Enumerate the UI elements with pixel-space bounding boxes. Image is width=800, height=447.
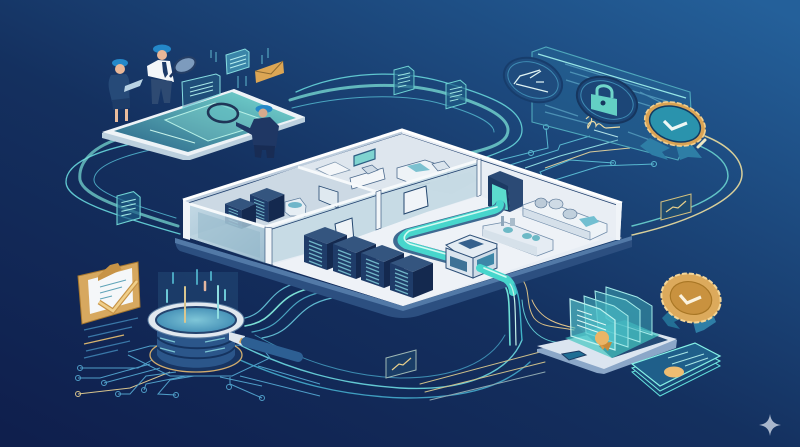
glass certificate pages: [606, 287, 652, 335]
glass wall long: [272, 160, 480, 263]
beam glow: [158, 272, 238, 318]
icon: clipboard with check: [78, 262, 140, 324]
person: inspector with magnifier: [147, 44, 198, 104]
person: woman with tablet: [109, 59, 143, 122]
icon: approval ribbon badge: [639, 95, 711, 160]
panel: isometric facility floor plan: [175, 130, 632, 318]
circuit traces: [76, 345, 320, 400]
panel: certificate card stack: [632, 343, 720, 396]
icon: small gold seal: [595, 331, 612, 351]
tablet body: [102, 89, 305, 160]
back room floor: [298, 134, 480, 192]
panel: certificate device: [537, 287, 677, 374]
device body: [537, 333, 677, 374]
icon: document on left flow: [117, 192, 140, 225]
code text lines beside clipboard: [84, 318, 138, 358]
magnifier ring: [148, 302, 244, 338]
arrow: wavy lines from magnifier to facility: [245, 282, 332, 338]
glass panel: [532, 47, 692, 160]
arrow: bottom flow loops: [240, 300, 575, 400]
front floor highlight: [272, 196, 600, 306]
arrow: top flow from tablet to facility: [290, 74, 522, 160]
stream out of facility: [480, 268, 574, 345]
partitions: [265, 160, 480, 227]
icon: document on top flow 1: [394, 66, 414, 95]
icon: sparkle watermark: [759, 414, 781, 436]
door openings: [335, 218, 354, 246]
person: inspector at tablet: [236, 105, 279, 158]
arrow: right flow from badge to facility: [632, 136, 742, 235]
data beams above lens: [167, 270, 225, 322]
arrow: left flow from tablet to facility: [66, 136, 180, 234]
icon: gold medal with ribbon: [656, 267, 726, 333]
teal glow platform: [565, 320, 660, 358]
icon: wall monitor: [354, 149, 375, 166]
icon: chart document on bottom flow: [386, 350, 416, 378]
back right wall: [402, 130, 622, 240]
back room benches and equipment: [316, 160, 478, 194]
icon: chart document on right flow: [661, 194, 691, 220]
magnifier handle: [229, 332, 298, 357]
stream through facility: [399, 204, 500, 258]
cylinder stack: [157, 325, 235, 368]
base plate: [175, 236, 632, 318]
server racks row: [304, 227, 433, 298]
front glass wall left room: [190, 204, 265, 263]
icon: padlock badge: [570, 69, 644, 131]
magnifier on tablet: [207, 103, 239, 123]
wall top rims: [183, 130, 622, 203]
floating documents: [182, 74, 220, 108]
glow floor ring: [150, 338, 242, 372]
stream gate: [488, 171, 523, 212]
panel: digital signature document: [498, 47, 711, 195]
floor: [183, 166, 622, 306]
lab counters: [483, 198, 607, 256]
back left wall: [183, 130, 402, 236]
icon: document on top flow 2: [446, 80, 466, 109]
circuit traces: [500, 124, 656, 195]
tablet screen: [114, 92, 296, 152]
processing unit: [446, 235, 497, 278]
panel: tablet review station: [102, 44, 305, 160]
signature: [586, 116, 620, 128]
small racks in left room: [225, 188, 306, 229]
panel: data magnifier cylinder: [76, 270, 320, 400]
icon: pen and hand badge: [498, 50, 568, 110]
